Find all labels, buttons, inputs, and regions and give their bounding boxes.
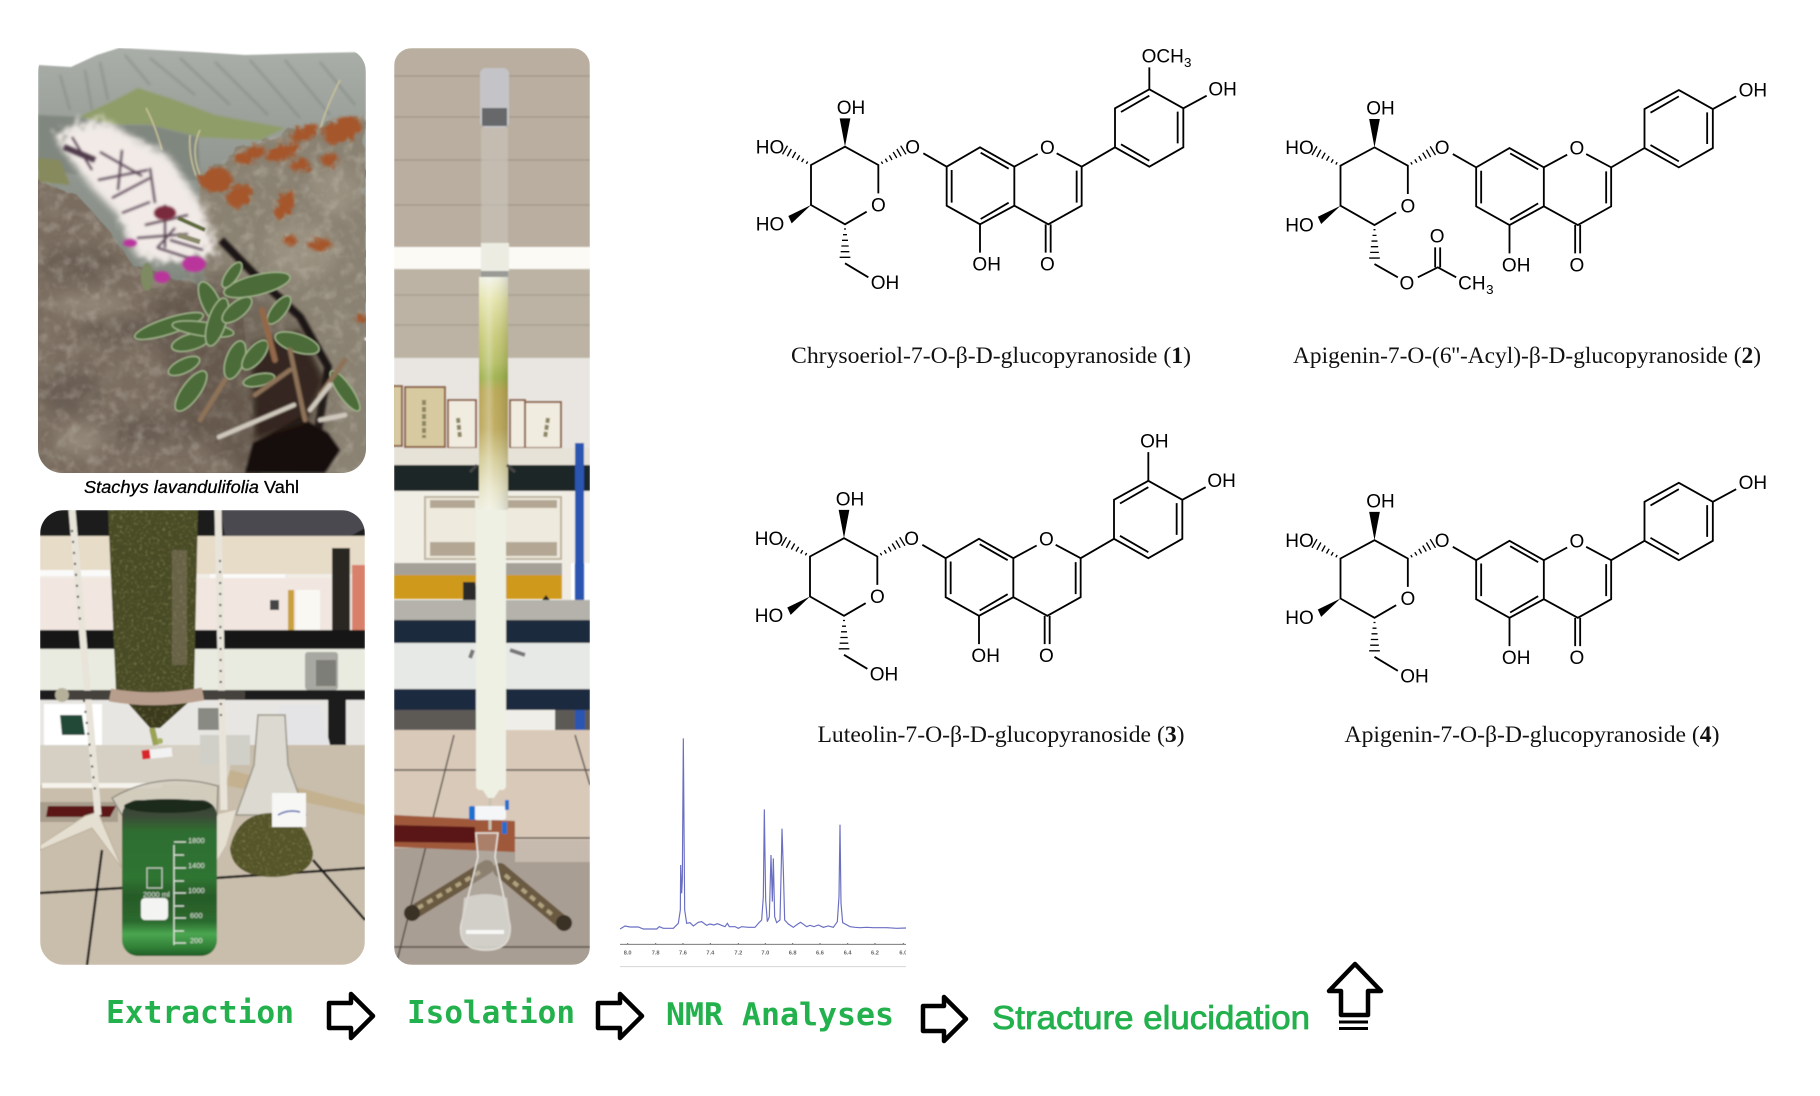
structure 1: chrysoeriol glucoside: O	[871, 196, 886, 217]
structure 3: luteolin glucoside: O	[870, 587, 885, 608]
photo: extraction glassware	[40, 510, 365, 965]
caption: compound 4: Apigenin-7-O-β-D-glucopyranoside (4)	[1344, 722, 1720, 748]
structure 1: chrysoeriol glucoside: O	[1040, 138, 1055, 159]
structure 2: apigenin acyl glucoside	[1285, 80, 1767, 297]
structure 2: apigenin acyl glucoside: OH	[1739, 80, 1767, 101]
structure 3: luteolin glucoside	[755, 431, 1236, 685]
structure 4: apigenin glucoside: HO	[1285, 531, 1314, 552]
structure 3: luteolin glucoside: OH	[870, 664, 898, 685]
structure 4: apigenin glucoside: O	[1569, 648, 1584, 669]
structure 1: chrysoeriol glucoside: O	[905, 137, 920, 158]
structure 3: luteolin glucoside: HO	[755, 606, 783, 627]
structure 1: chrysoeriol glucoside: OH	[1208, 80, 1237, 101]
structure 1: chrysoeriol glucoside	[756, 47, 1237, 294]
arrow: extraction to isolation	[329, 994, 373, 1038]
photo: chromatography column	[392, 48, 590, 965]
structure 2: apigenin acyl glucoside: O	[1430, 226, 1445, 247]
structure 2: apigenin acyl glucoside: O	[1435, 138, 1450, 159]
photo: extraction glassware: 600	[190, 911, 203, 920]
structure 3: luteolin glucoside: OH	[1140, 431, 1169, 452]
structure 2: apigenin acyl glucoside: CH	[1458, 274, 1486, 295]
structure 4: apigenin glucoside: O	[1435, 531, 1450, 552]
structure 2: apigenin acyl glucoside: 3	[1486, 282, 1494, 297]
NMR spectrum: 6.4	[844, 951, 852, 957]
structure 1: chrysoeriol glucoside: HO	[756, 215, 784, 236]
structure 3: luteolin glucoside: HO	[755, 529, 783, 550]
structure 4: apigenin glucoside: O	[1569, 531, 1584, 552]
structure 2: apigenin acyl glucoside: O	[1400, 196, 1415, 217]
NMR spectrum: 7.2	[734, 951, 742, 957]
caption: compound 2: Apigenin-7-O-(6''-Acyl)-β-D-glucopyranoside (2)	[1293, 343, 1761, 369]
structure 4: apigenin glucoside: OH	[1366, 491, 1395, 512]
step label: Stracture elucidation: Stracture elucidation	[992, 999, 1310, 1036]
photo: Stachys lavandulifolia plant on rock	[30, 48, 370, 480]
structure 4: apigenin glucoside: HO	[1285, 608, 1314, 629]
structure 1: chrysoeriol glucoside: OH	[871, 273, 899, 294]
caption: plant name: Stachys lavandulifolia Vahl	[84, 477, 299, 497]
structure 1: chrysoeriol glucoside: HO	[756, 137, 784, 158]
structure 1: chrysoeriol glucoside: 3	[1184, 55, 1191, 70]
NMR spectrum: 7.0	[761, 951, 769, 957]
structure 2: apigenin acyl glucoside: HO	[1285, 138, 1314, 159]
NMR spectrum: 7.8	[652, 951, 660, 957]
structure 3: luteolin glucoside: OH	[836, 489, 864, 510]
caption: compound 3: Luteolin-7-O-β-D-glucopyranoside (3)	[818, 722, 1184, 748]
NMR spectrum: 6.2	[871, 951, 879, 957]
arrow: isolation to NMR	[598, 994, 642, 1038]
arrow: up to structures	[1329, 964, 1381, 1028]
structure 2: apigenin acyl glucoside: O	[1399, 274, 1414, 295]
structure 4: apigenin glucoside	[1285, 473, 1767, 687]
photo: extraction glassware: 200	[190, 936, 203, 945]
structure 1: chrysoeriol glucoside: OH	[837, 98, 865, 119]
structure 4: apigenin glucoside: O	[1400, 589, 1415, 610]
caption: compound 1: Chrysoeriol-7-O-β-D-glucopyranoside (1)	[791, 343, 1191, 369]
photo: extraction glassware: 1000	[188, 886, 205, 895]
structure 3: luteolin glucoside: O	[1039, 646, 1054, 667]
NMR spectrum: 6.8	[789, 951, 797, 957]
structure 1: chrysoeriol glucoside: OCH	[1142, 47, 1184, 68]
structure 4: apigenin glucoside: OH	[1400, 666, 1429, 687]
structure 3: luteolin glucoside: OH	[1207, 471, 1236, 492]
structure 2: apigenin acyl glucoside: HO	[1285, 215, 1314, 236]
structure 4: apigenin glucoside: OH	[1739, 473, 1767, 494]
NMR spectrum: 8.0	[624, 951, 632, 957]
structure 2: apigenin acyl glucoside: OH	[1366, 99, 1395, 120]
NMR spectrum: 7.6	[679, 951, 687, 957]
step label: NMR Analyses: NMR Analyses	[666, 997, 894, 1033]
NMR spectrum: 7.4	[706, 951, 715, 957]
step label: Extraction: Extraction	[106, 995, 294, 1031]
structure 2: apigenin acyl glucoside: O	[1569, 255, 1584, 276]
structure 4: apigenin glucoside: OH	[1502, 648, 1530, 669]
NMR spectrum: 6.0	[899, 951, 907, 957]
structure 1: chrysoeriol glucoside: OH	[972, 255, 1001, 276]
structure 3: luteolin glucoside: OH	[971, 646, 1000, 667]
structure 2: apigenin acyl glucoside: O	[1569, 139, 1584, 160]
NMR spectrum	[620, 738, 907, 967]
structure 3: luteolin glucoside: O	[904, 529, 919, 550]
NMR spectrum: 6.6	[816, 951, 824, 957]
photo: extraction glassware: 2000 ml	[143, 890, 170, 899]
photo: extraction glassware: 1800	[188, 836, 205, 845]
photo: extraction glassware: 1400	[188, 861, 205, 870]
structure 1: chrysoeriol glucoside: O	[1040, 255, 1055, 276]
step label: Isolation: Isolation	[407, 995, 575, 1031]
structure 2: apigenin acyl glucoside: OH	[1502, 255, 1530, 276]
arrow: NMR to structure	[923, 997, 966, 1041]
structure 3: luteolin glucoside: O	[1039, 529, 1054, 550]
